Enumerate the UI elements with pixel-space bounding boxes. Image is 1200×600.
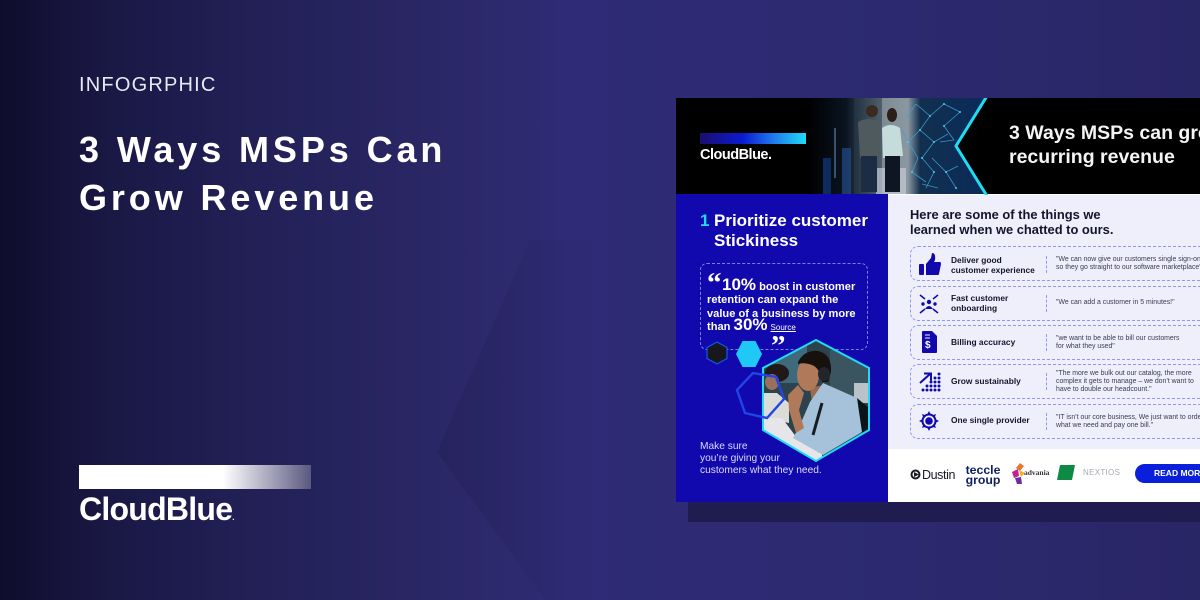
stat text: [707, 275, 856, 334]
left blue panel: [676, 194, 888, 502]
row quote: complex it gets to manage – we don’t want to: [1056, 378, 1194, 385]
cyan chevron: [956, 96, 987, 196]
Dustin wordmark: Dustin: [922, 468, 955, 482]
main title: Grow Revenue: [79, 177, 378, 218]
photo hexagon: support agent with headset: [762, 338, 870, 462]
row title: [951, 293, 1008, 313]
row outline: [910, 404, 1200, 439]
panel heading: Here are some of the things we: [910, 207, 1101, 222]
closing quote mark: ”: [771, 330, 786, 362]
row quote: have to double our headcount.": [1056, 386, 1152, 393]
black hexagon: [706, 342, 728, 364]
partner logo strip: [888, 449, 1200, 502]
header logo wordmark: CloudBlue.: [700, 147, 772, 163]
panel shadow: [688, 502, 1200, 522]
row quote: "We can add a customer in 5 minutes!": [1056, 299, 1175, 306]
closing message: you’re giving your: [700, 453, 780, 464]
brand logo: CloudBlue: [79, 465, 311, 527]
logo: teccle group: [966, 463, 1000, 486]
row title: Fast customer: [951, 293, 1008, 303]
panel heading: learned when we chatted to ours.: [910, 222, 1113, 237]
header title: recurring revenue: [1009, 146, 1175, 168]
row title: onboarding: [951, 303, 997, 313]
closing message: [700, 441, 822, 476]
row: one single provider: [910, 404, 1200, 439]
row outline: [910, 364, 1200, 399]
opening quote mark: “: [707, 267, 722, 299]
section heading: Prioritize customer: [714, 211, 868, 230]
closing message: customers what they need.: [700, 465, 822, 476]
eyebrow label: INFOGRPHIC: [79, 74, 217, 96]
row quote: [1056, 414, 1200, 429]
row title: Billing accuracy: [951, 337, 1015, 347]
row: good customer experience: [910, 246, 1200, 281]
stat text: retention can expand the: [707, 294, 838, 306]
row quote: [1056, 334, 1180, 350]
logo: NEXTIOS: NEXTIOS: [1083, 468, 1120, 477]
advania mark: [1012, 463, 1025, 484]
row quote: what we need and pay one bill.": [1056, 422, 1153, 429]
infographic preview panel: [676, 98, 1200, 502]
row quote: "we want to be able to bill our customers: [1056, 335, 1179, 342]
logo: advania: [1012, 463, 1050, 484]
row title: Grow sustainably: [951, 376, 1021, 386]
main title: 3 Ways MSPs Can: [79, 129, 446, 170]
row quote: "IT isn’t our core business, We just want to order: [1056, 414, 1200, 421]
logo wordmark: CloudBlue.: [79, 491, 234, 527]
icon: growth arrow with dots: [919, 372, 940, 392]
row: billing accuracy: [910, 325, 1200, 360]
outline hexagon: [736, 372, 786, 420]
cyan hexagon: [736, 341, 762, 367]
header title: [1009, 122, 1200, 168]
row quote: "The more we bulk out our catalog, the more: [1056, 370, 1192, 377]
row quote: [1056, 370, 1194, 393]
Dustin mark: [910, 470, 920, 480]
section heading: Stickiness: [714, 231, 798, 250]
icon: people group: [920, 294, 938, 314]
main title: [79, 129, 446, 218]
stat text: than 30% Source: [707, 315, 796, 334]
right lavender panel: [888, 195, 1200, 449]
advania wordmark: advania: [1024, 468, 1049, 477]
header band: [676, 98, 1200, 194]
logo: green badge: [1057, 465, 1075, 480]
row: grow sustainably: [910, 364, 1200, 399]
icon: gear sun: [919, 411, 939, 431]
row outline: [910, 325, 1200, 360]
read more button: [1135, 464, 1200, 483]
icon: dollar sign: $: [925, 340, 931, 351]
section number: 1: [700, 211, 709, 230]
row title: customer experience: [951, 265, 1035, 275]
row outline: [910, 246, 1200, 281]
row title: Deliver good: [951, 255, 1002, 265]
stat text: value of a business by more: [707, 308, 856, 320]
header logo gradient bar: [700, 133, 806, 144]
row: fast onboarding: [910, 286, 1200, 321]
section heading: [714, 211, 868, 250]
icon: invoice: [922, 331, 937, 353]
logo: teccle group: group: [966, 472, 1000, 486]
row quote: for what they used": [1056, 343, 1115, 350]
row quote: [1056, 256, 1200, 271]
closing message: Make sure: [700, 441, 748, 452]
logo: teccle group: teccle: [966, 463, 1000, 477]
panel heading: [910, 207, 1113, 237]
logo gradient bar: [79, 465, 311, 489]
logo: Dustin: [910, 468, 955, 482]
row quote: so they go straight to our software marketplace": [1056, 264, 1200, 271]
row title: [951, 255, 1035, 275]
row quote: "We can now give our customers single sign-on,: [1056, 256, 1200, 263]
row title: One single provider: [951, 415, 1030, 425]
icon: thumbs up: [919, 253, 941, 275]
stat callout box: [700, 263, 868, 350]
row outline: [910, 286, 1200, 321]
header photo: data centre with two people: [816, 98, 988, 195]
stat text: 10% boost in customer: [722, 275, 855, 294]
